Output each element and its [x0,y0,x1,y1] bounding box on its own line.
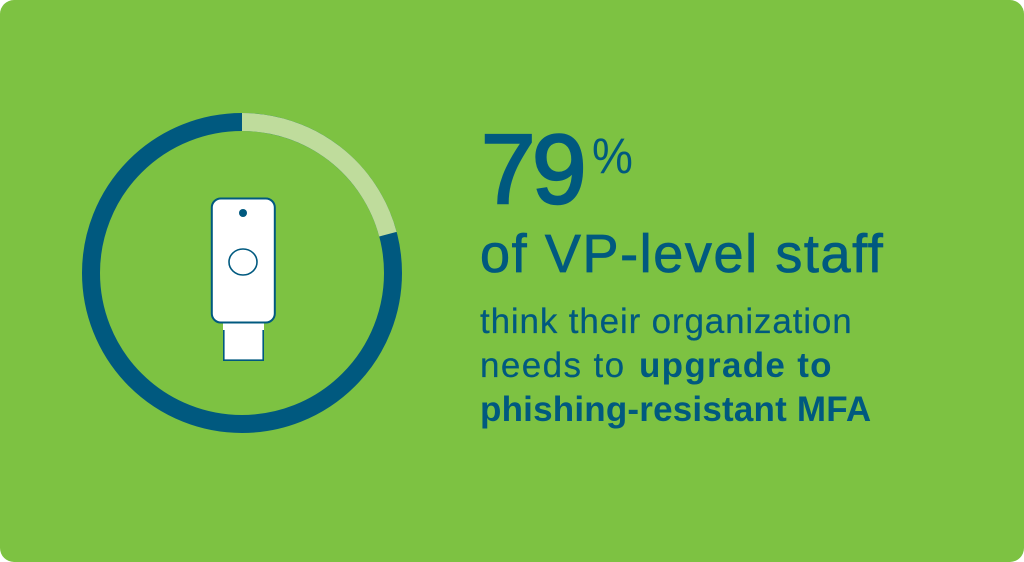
description text: upgrade to [639,346,833,385]
description text: needs to [480,346,625,385]
description text: phishing-resistant MFA [480,390,871,429]
icon: security key [212,198,275,361]
donut ring: 79% dark, 21% light [91,122,393,424]
description text: think their organization [480,302,853,341]
headline number: 79 [481,114,583,224]
description text [480,302,871,429]
subheading: of VP-level staff [480,224,884,284]
percent sign: % [592,128,633,184]
